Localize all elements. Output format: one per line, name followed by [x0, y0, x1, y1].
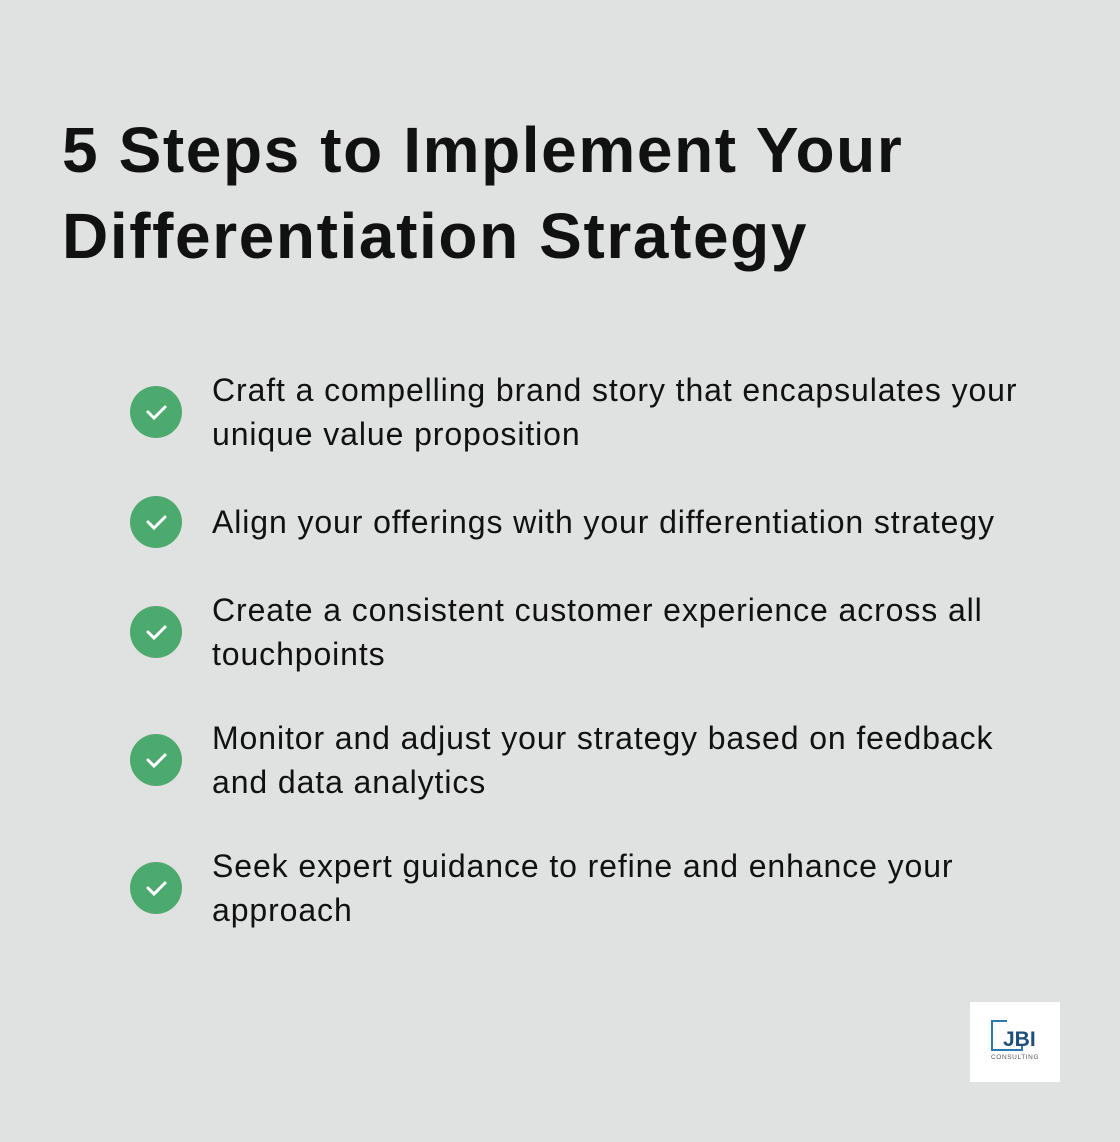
step 3 text: Create a consistent customer experience across all touchpoints — [212, 592, 983, 672]
title — [62, 114, 903, 272]
step 5 text: Seek expert guidance to refine and enhance your approach — [212, 848, 953, 928]
title: Differentiation Strategy — [62, 200, 808, 272]
icon: check — [130, 734, 182, 786]
step 2 text: Align your offerings with your differentiation strategy — [212, 504, 995, 540]
icon: check — [130, 862, 182, 914]
title: 5 Steps to Implement Your — [62, 114, 903, 186]
step 1 text: Craft a compelling brand story that encapsulates your unique value proposition — [212, 372, 1017, 452]
step 5 — [130, 848, 953, 928]
logo: JBI — [1003, 1028, 1036, 1051]
icon: check — [130, 496, 182, 548]
logo: CONSULTING — [991, 1054, 1039, 1061]
icon: check — [130, 386, 182, 438]
step 4 text: Monitor and adjust your strategy based on feedback and data analytics — [212, 720, 993, 800]
step 4 — [130, 720, 993, 800]
icon: check — [130, 606, 182, 658]
step 2 — [130, 496, 995, 548]
step 1 — [130, 372, 1017, 452]
step 3 — [130, 592, 983, 672]
logo — [970, 1002, 1060, 1082]
